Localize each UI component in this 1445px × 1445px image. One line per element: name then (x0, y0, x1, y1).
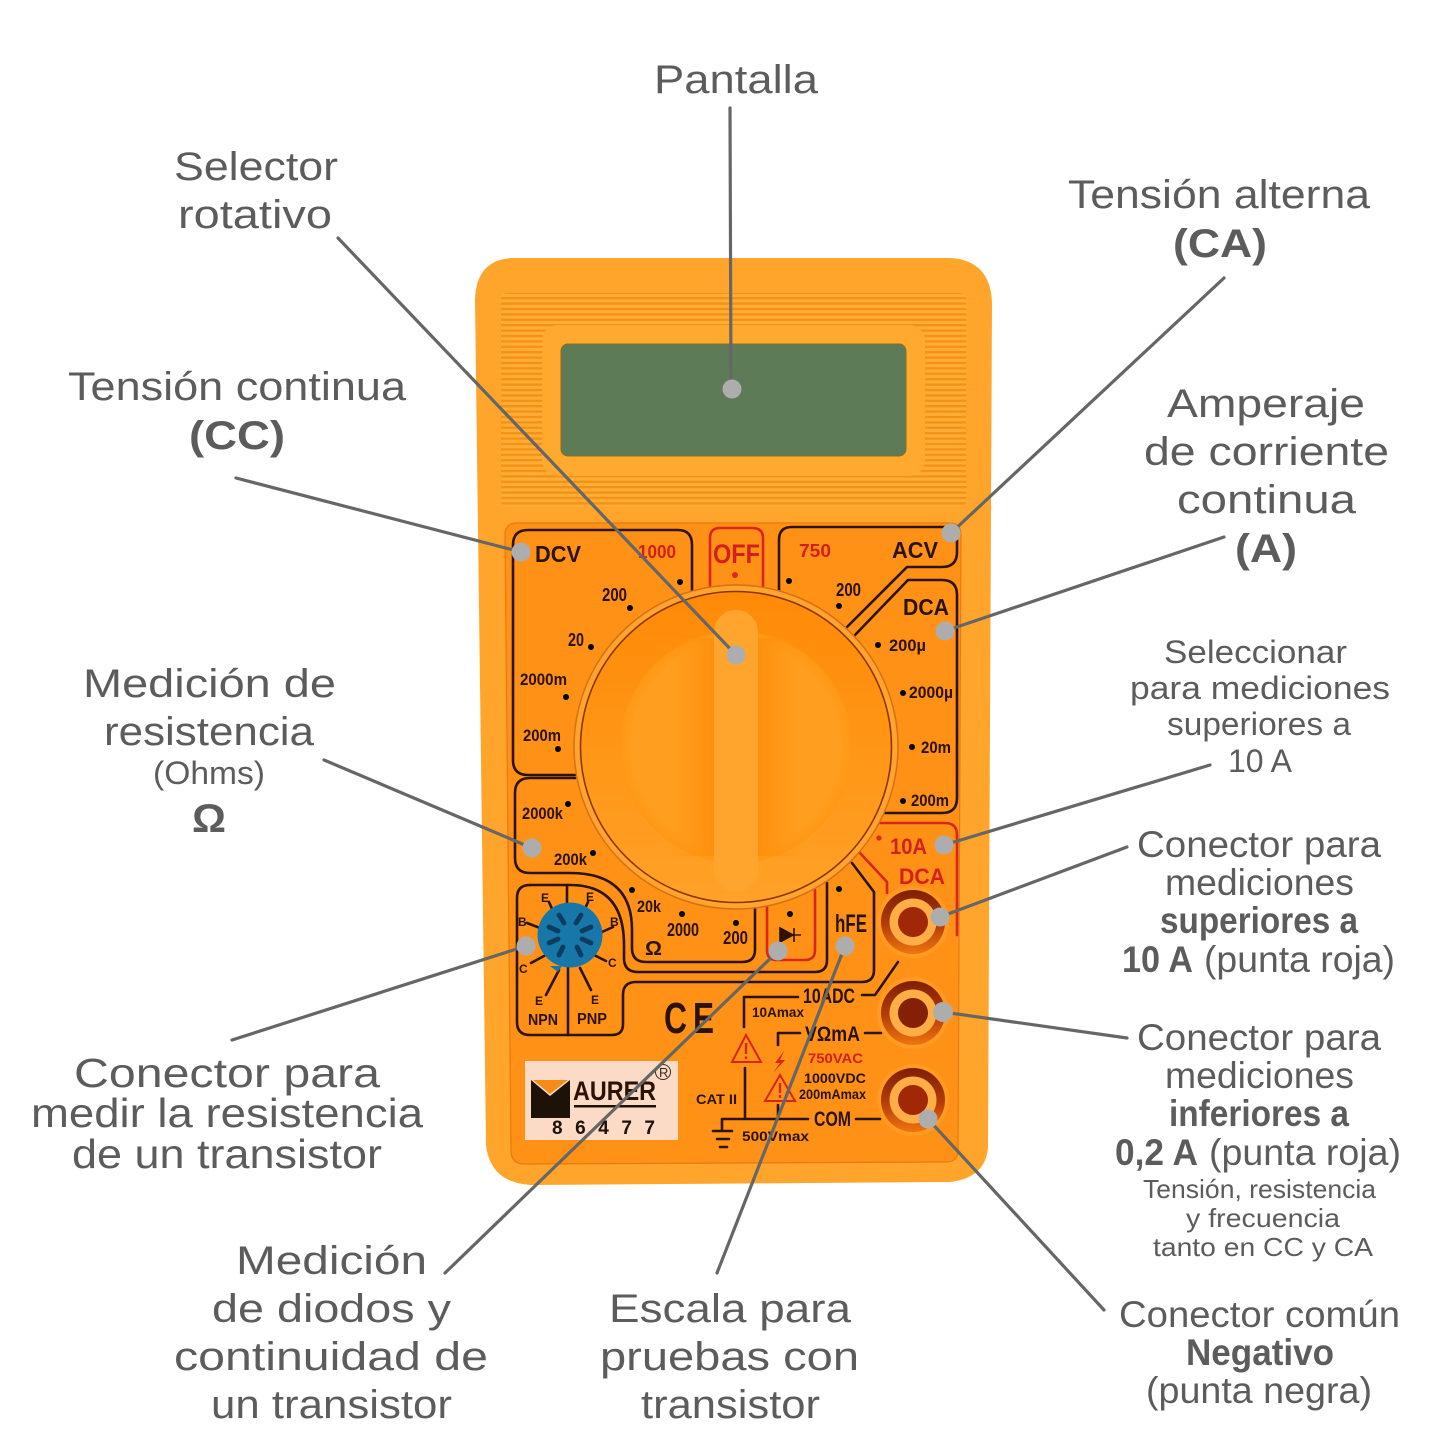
leader: Selector rotativo (338, 238, 746, 664)
label: Conector para medir la resistencia de un transistor (31, 1050, 423, 1177)
label: Conector superiores a 10 A: 10 A (1122, 939, 1193, 980)
OFF position (710, 528, 763, 590)
resistance range markings: 20k (637, 897, 661, 916)
leader lines and anchor dots (232, 108, 1224, 1310)
leader: Conector superiores (930, 847, 1127, 926)
label: Conector para medir la resistencia de un transistor: de un transistor (72, 1131, 382, 1177)
leader: Amperaje (936, 537, 1224, 640)
transistor socket block: B (518, 915, 527, 929)
ACV range markings: ACV (892, 537, 939, 563)
transistor socket block: C (519, 962, 528, 976)
ribbed display surround (501, 293, 966, 507)
label: Medición de resistencia: Ω (192, 797, 226, 841)
transistor socket block: E (591, 993, 599, 1007)
label: Conector inferiores a 0,2 A: Conector para (1137, 1017, 1381, 1058)
label: Medición de diodos y continuidad (174, 1239, 488, 1427)
label: Conector común Negativo (1119, 1294, 1400, 1411)
ACV range markings: 200 (836, 580, 861, 600)
device body (475, 258, 992, 1185)
label: Conector común Negativo: (punta negra) (1146, 1370, 1372, 1411)
label: Medición de resistencia: Medición de (83, 662, 336, 706)
label: Medición de diodos y continuidad: de diodos y (212, 1287, 451, 1331)
label: Seleccionar para mediciones superiores a 10 A: Seleccionar (1164, 634, 1347, 670)
resistance range markings: 200k (554, 850, 587, 869)
lower control panel (505, 523, 961, 1164)
leader: Seleccionar 10 A (934, 765, 1210, 854)
DCV range markings (513, 530, 692, 775)
label: Conector inferiores a 0,2 A: 0,2 A (1115, 1132, 1198, 1173)
label: Escala para pruebas con transistor: transistor (641, 1383, 820, 1427)
transistor socket block: E (541, 891, 549, 905)
label: Seleccionar para mediciones superiores a 10 A (1130, 634, 1390, 779)
label: Amperaje de corriente continua (A): continua (1177, 478, 1357, 522)
label: Conector superiores a 10 A: Conector para (1137, 824, 1381, 865)
display bezel (542, 325, 925, 476)
LCD screen (561, 344, 906, 456)
terminal legends and wiring: 10ADC (803, 985, 855, 1008)
leader: Medición de diodos (445, 942, 788, 1273)
terminal legends and wiring: 750VAC (808, 1050, 863, 1066)
label: Medición de resistencia: resistencia (104, 710, 315, 754)
transistor socket block: B (610, 915, 619, 929)
MAURER brand label: R (659, 1065, 668, 1080)
label: Conector inferiores a 0,2 A: mediciones (1165, 1055, 1354, 1096)
CE mark: C (664, 994, 687, 1043)
label: Tensión continua (CC): Tensión continua (68, 365, 407, 409)
label: Medición de resistencia (83, 662, 336, 841)
terminal legends and wiring (696, 962, 898, 1147)
label: Tensión, resistencia y frecuencia: tanto en CC y CA (1153, 1232, 1374, 1262)
label: Conector superiores a 10 A: (punta roja) (1204, 939, 1395, 980)
MAURER brand label: 86477 (552, 1118, 655, 1139)
resistance range markings: Ω (645, 938, 662, 960)
terminal legends and wiring: CAT II (696, 1091, 737, 1107)
10A DCA red zone (860, 823, 957, 935)
label: Seleccionar para mediciones superiores a 10 A: superiores a (1167, 706, 1351, 742)
DCA range markings (855, 580, 957, 813)
DCA range markings: 20m (921, 738, 951, 757)
ACV range markings (779, 527, 957, 627)
resistance range markings (515, 778, 755, 962)
label: Selector rotativo: Selector (174, 145, 338, 189)
CE mark (664, 994, 714, 1043)
label: Tensión continua (CC): (CC) (189, 414, 285, 458)
selector knob handle (714, 610, 758, 892)
label: Escala para pruebas con transistor: Escala para (609, 1287, 852, 1331)
transistor socket block: NPN (528, 1012, 558, 1029)
label: Medición de diodos y continuidad: un transistor (211, 1383, 452, 1427)
label: Conector común Negativo: Conector común (1119, 1294, 1400, 1335)
label: Seleccionar para mediciones superiores a 10 A: 10 A (1228, 743, 1293, 779)
transistor socket block: PNP (577, 1011, 607, 1028)
label: Conector superiores a 10 A (1122, 824, 1395, 980)
terminal legends and wiring: VΩmA (805, 1023, 860, 1046)
MAURER brand label: AURER (573, 1076, 656, 1106)
leader: Escala hFE (717, 936, 854, 1273)
label: Tensión, resistencia y frecuencia: Tensión, resistencia (1143, 1174, 1377, 1204)
label: Tensión, resistencia y frecuencia (1143, 1174, 1377, 1262)
label: Pantalla: Pantalla (654, 58, 819, 102)
label: Selector rotativo (174, 145, 338, 237)
label: Amperaje de corriente continua (A): de corriente (1144, 430, 1389, 474)
label: Amperaje de corriente continua (A) (1144, 382, 1389, 571)
terminal legends and wiring: 10Amax (752, 1004, 804, 1020)
leader: Conector transistor (232, 936, 536, 1040)
icon: warning triangles (732, 1035, 795, 1101)
label: Escala para pruebas con transistor (600, 1287, 859, 1427)
label: Medición de resistencia: (Ohms) (153, 755, 265, 791)
diode test position (767, 890, 815, 960)
resistance range markings: 2000 (667, 920, 699, 940)
label: Amperaje de corriente continua (A): (A) (1235, 527, 1297, 571)
ACV range markings: 750 (799, 541, 831, 561)
transistor socket block: C (608, 956, 617, 970)
leader: Conector inferiores (933, 1002, 1127, 1038)
DCA range markings: 200µ (889, 636, 926, 655)
label: Medición de diodos y continuidad: continuidad de (174, 1335, 488, 1379)
DCA range markings: 200m (911, 791, 949, 810)
DCV range markings: 200m (523, 726, 561, 745)
MAURER brand label (525, 1061, 678, 1140)
terminal legends and wiring: COM (814, 1108, 851, 1131)
10A DCA red zone: DCA (899, 864, 945, 889)
input sockets (877, 886, 949, 1136)
label: Selector rotativo: rotativo (178, 193, 332, 237)
terminal legends and wiring: 200mAmax (799, 1086, 866, 1102)
OFF position: OFF (713, 539, 760, 569)
label: Tensión alterna (CA) (1068, 173, 1371, 266)
DCA range markings: DCA (903, 594, 949, 620)
label: Medición de diodos y continuidad: Medición (236, 1239, 427, 1283)
hFE position: hFE (835, 910, 867, 938)
label: Seleccionar para mediciones superiores a 10 A: para mediciones (1130, 670, 1390, 706)
leader: Tensión continua (236, 478, 530, 562)
leader: Tensión alterna (942, 278, 1224, 542)
label: Conector inferiores a 0,2 A (1115, 1017, 1401, 1173)
label: Conector superiores a 10 A: superiores a (1160, 900, 1358, 941)
resistance range markings: 2000k (522, 804, 563, 823)
rotary selector dial (574, 585, 898, 909)
label: Tensión alterna (CA): (CA) (1173, 222, 1267, 266)
transistor socket block (517, 863, 874, 1035)
leader: Medición de resistencia (324, 760, 542, 858)
icon: blue transistor socket (538, 902, 602, 972)
label: Conector superiores a 10 A: mediciones (1165, 862, 1354, 903)
label: Conector para medir la resistencia de un transistor: Conector para (74, 1050, 380, 1096)
label: Conector común Negativo: Negativo (1186, 1332, 1334, 1373)
leader: Pantalla (722, 108, 742, 398)
terminal legends and wiring: 500Vmax (742, 1128, 809, 1144)
CE mark: E (693, 994, 714, 1043)
label: Tensión, resistencia y frecuencia: y frecuencia (1186, 1203, 1341, 1233)
label: Tensión alterna (CA): Tensión alterna (1068, 173, 1371, 217)
transistor socket block: E (586, 890, 594, 904)
DCV range markings: 1000 (638, 542, 676, 562)
leader: Conector común (918, 1110, 1104, 1310)
transistor socket block: E (535, 994, 543, 1008)
hFE position (835, 886, 867, 938)
DCA range markings: 2000µ (909, 683, 953, 702)
label: Amperaje de corriente continua (A): Amperaje (1167, 382, 1365, 426)
10A DCA red zone: 10A (890, 834, 927, 859)
resistance range markings: 200 (723, 928, 748, 948)
DCV range markings: DCV (535, 541, 582, 567)
label: Conector inferiores a 0,2 A: inferiores a (1169, 1093, 1349, 1134)
DCV range markings: 200 (602, 585, 627, 605)
DCV range markings: 2000m (520, 670, 567, 689)
multimeter device (475, 258, 992, 1185)
label: Tensión continua (CC) (68, 365, 407, 458)
label: Escala para pruebas con transistor: pruebas con (600, 1335, 859, 1379)
terminal legends and wiring: 1000VDC (804, 1070, 866, 1086)
DCV range markings: 20 (568, 630, 584, 650)
label: Conector para medir la resistencia de un transistor: medir la resistencia (31, 1090, 423, 1136)
label: Conector inferiores a 0,2 A: (punta roja) (1209, 1132, 1401, 1173)
